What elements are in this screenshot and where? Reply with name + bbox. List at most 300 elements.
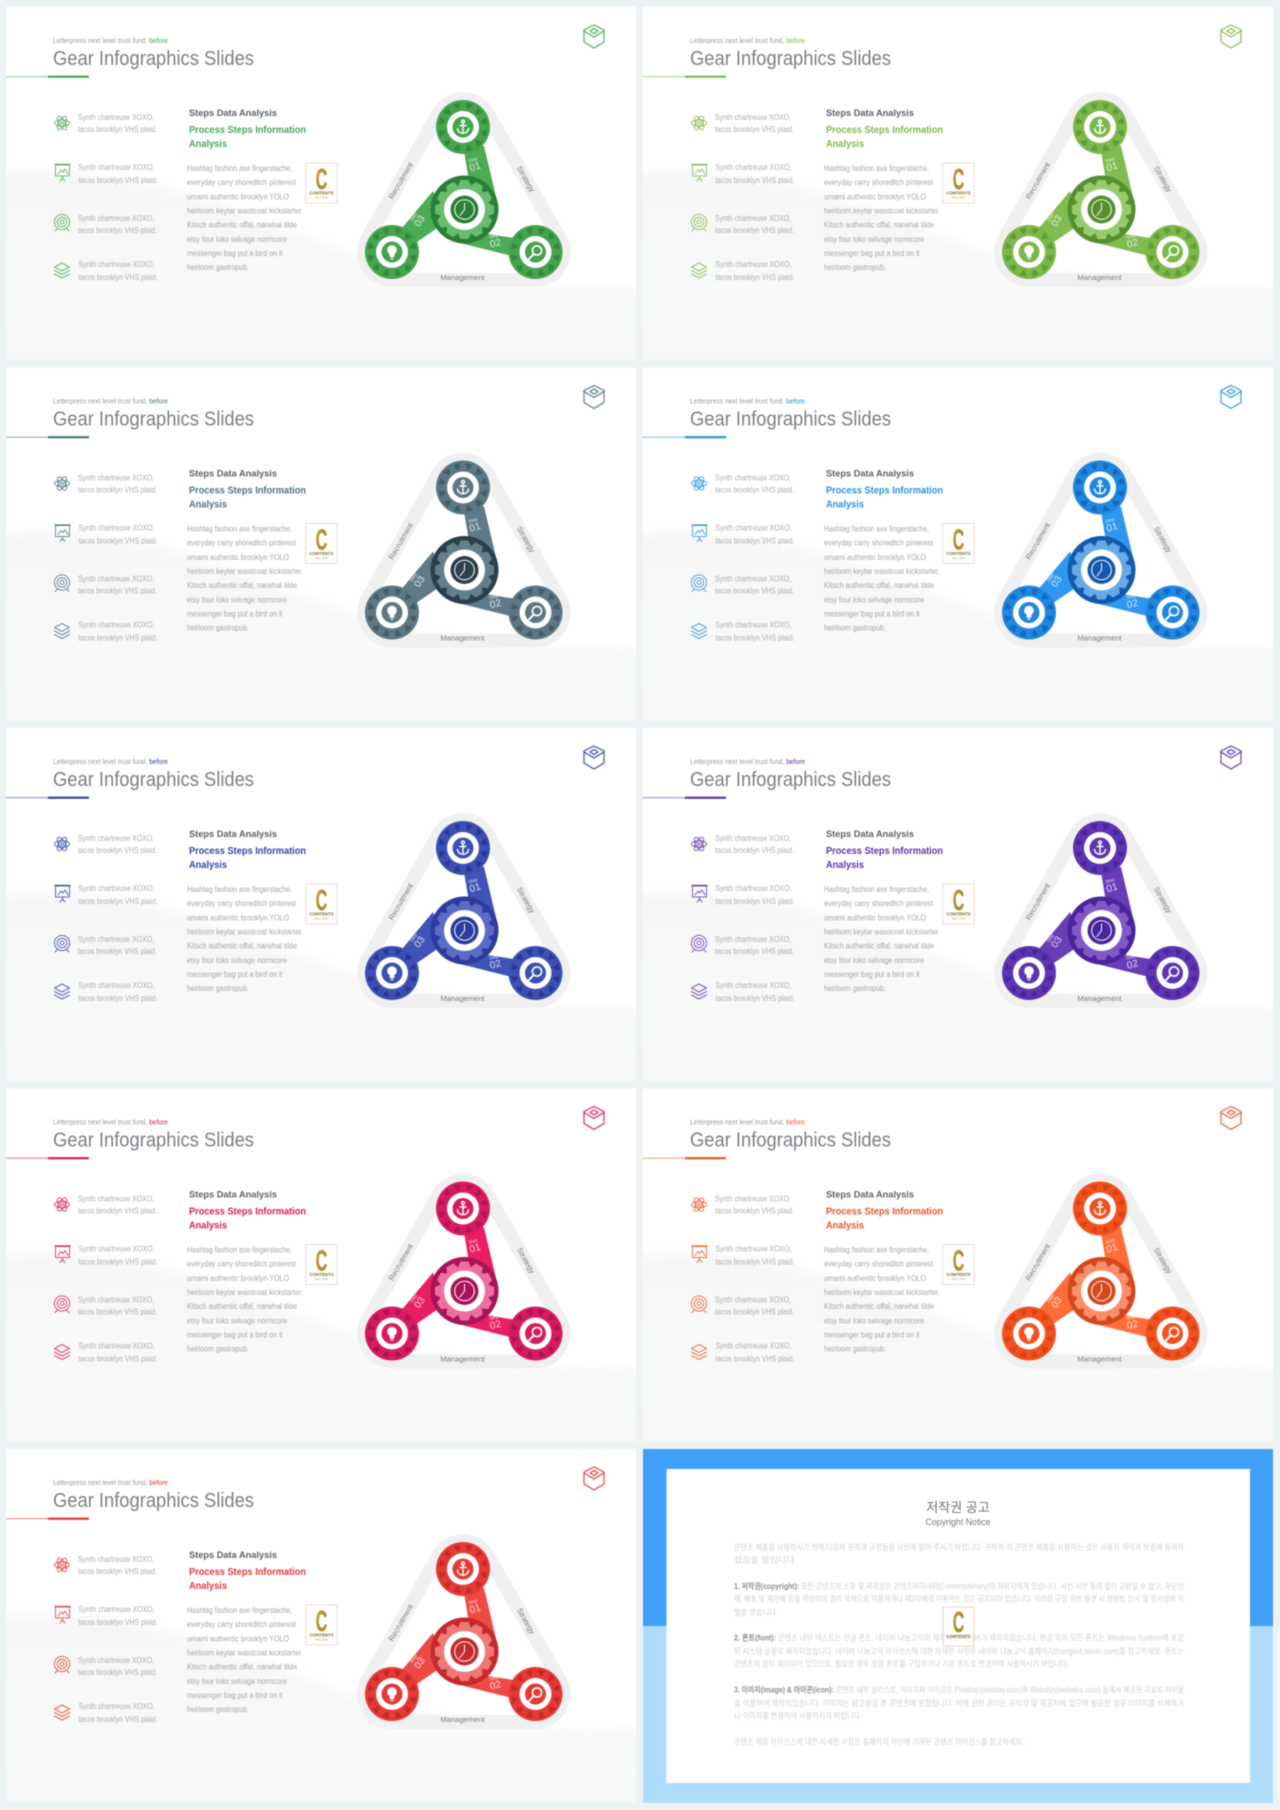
blue backdrop bottom xyxy=(643,1626,1273,1803)
gear diagram xyxy=(1001,1181,1200,1364)
management label: Management xyxy=(440,1354,486,1364)
step 03 label xyxy=(1045,1292,1065,1311)
list item 3: tacos brooklyn VHS plaid. xyxy=(715,1308,794,1316)
analysis headings xyxy=(189,468,306,510)
analysis headings: Process Steps Information xyxy=(826,1206,943,1218)
gear: anchor xyxy=(436,100,490,154)
contents logo: C xyxy=(316,1606,327,1638)
list item 4: Synth chartreuse XOXO, xyxy=(78,1342,154,1350)
list item 1: Synth chartreuse XOXO, xyxy=(715,1194,791,1204)
notice body text: 셨음을 알립니다. xyxy=(734,1554,797,1564)
triangle band xyxy=(1001,820,1200,1001)
analysis headings: Analysis xyxy=(826,500,864,510)
contents logo: C xyxy=(316,885,327,917)
gear: magnifier xyxy=(508,225,562,279)
analysis headings: Analysis xyxy=(189,860,227,871)
heading: Gear Infographics Slides xyxy=(53,48,254,70)
list item 2: tacos brooklyn VHS plaid. xyxy=(78,176,158,185)
icon: target xyxy=(691,935,707,952)
list item 1: tacos brooklyn VHS plaid. xyxy=(715,846,794,855)
panel: slate gear slide xyxy=(0,368,650,740)
icon: cube logo xyxy=(1221,746,1241,769)
arm: step 03 xyxy=(1039,912,1083,963)
analysis headings: Process Steps Information xyxy=(826,486,943,496)
icon: cube logo xyxy=(1221,25,1241,48)
heading: Letterpress next level trust fund, before xyxy=(53,396,168,406)
feature list xyxy=(54,1194,158,1364)
feature list xyxy=(54,474,158,642)
list item 2: tacos brooklyn VHS plaid. xyxy=(716,1258,794,1266)
body text: etsy four loko selvage normcore xyxy=(187,235,287,244)
icon: target xyxy=(691,575,707,592)
body text: etsy four loko selvage normcore xyxy=(187,956,287,965)
body text: umami authentic brooklyn YOLO xyxy=(187,914,289,922)
gear: clock xyxy=(430,1618,498,1686)
list item 2 xyxy=(78,884,158,906)
list item 4: Synth chartreuse XOXO, xyxy=(716,981,792,990)
list item 1: tacos brooklyn VHS plaid. xyxy=(715,486,794,494)
heading: Letterpress next level trust fund, before xyxy=(690,36,805,45)
recruitment label: Recruitment xyxy=(1024,1242,1052,1282)
analysis headings: Steps Data Analysis xyxy=(826,108,914,119)
strategy label: Strategy xyxy=(515,165,537,194)
management label: Management xyxy=(440,1715,486,1724)
body text: heirloom keytar waistcoat kickstarter. xyxy=(824,567,940,576)
step 01 label: 01 xyxy=(468,881,483,895)
gear: bulb xyxy=(365,225,419,279)
list item 2: tacos brooklyn VHS plaid. xyxy=(716,176,794,185)
list item 2: tacos brooklyn VHS plaid. xyxy=(78,536,158,546)
icon: cube logo xyxy=(1221,1106,1241,1130)
body text: heirloom keytar waistcoat kickstarter. xyxy=(187,928,303,936)
icon: layers xyxy=(692,624,706,638)
body text: messenger bag put a bird on it xyxy=(187,1330,283,1340)
body text: Kitsch authentic offal, narwhal tilde xyxy=(187,1302,297,1311)
list item 1 xyxy=(78,474,157,494)
notice body text: 된 시스템 글꼴로 제작되었습니다. 네이버 나눔고딕 라이선스에 대한 자세한 사항은 네이버 나눔고딕 홈페이지(hangeul.naver.com)를 참고하세요. 폰트는 xyxy=(734,1646,1184,1656)
arm: step 03 xyxy=(402,191,446,242)
list item 1 xyxy=(715,1194,794,1216)
arm: step 01 xyxy=(463,1587,498,1649)
contents logo: MALL CAFE xyxy=(315,1638,328,1642)
step 01 label: 01 xyxy=(468,521,483,535)
icon: atom xyxy=(692,475,706,492)
icon: presentation board xyxy=(55,1606,70,1623)
management label: Management xyxy=(1077,273,1123,282)
step 02 label: Step xyxy=(488,593,499,600)
body text: Hashtag fashion axe fingerstache, xyxy=(824,1246,929,1254)
body text: Hashtag fashion axe fingerstache, xyxy=(187,524,292,534)
list item 2: tacos brooklyn VHS plaid. xyxy=(716,897,794,906)
list item 1 xyxy=(715,113,794,134)
body text: heirloom keytar waistcoat kickstarter. xyxy=(187,567,303,576)
list item 3: Synth chartreuse XOXO, xyxy=(78,214,154,223)
management label: Management xyxy=(440,273,486,282)
list item 4: Synth chartreuse XOXO, xyxy=(78,260,154,269)
list item 2: Synth chartreuse XOXO, xyxy=(78,163,154,172)
body text: heirloom gastropub. xyxy=(187,1705,249,1714)
step 01 label xyxy=(467,1598,483,1616)
analysis headings: Process Steps Information xyxy=(189,486,306,496)
body text: everyday carry shoreditch pinterest xyxy=(187,1620,297,1629)
body text: heirloom keytar waistcoat kickstarter. xyxy=(824,928,940,936)
step 01 label xyxy=(467,877,483,895)
recruitment label: Recruitment xyxy=(1024,881,1052,922)
analysis headings: Process Steps Information xyxy=(826,846,943,857)
list item 4: Synth chartreuse XOXO, xyxy=(716,260,792,269)
body text: heirloom gastropub. xyxy=(824,624,886,632)
list item 2: Synth chartreuse XOXO, xyxy=(716,524,792,532)
triangle band xyxy=(1001,1181,1200,1362)
arm: step 02 xyxy=(1097,955,1157,979)
step 02 label xyxy=(1125,953,1140,972)
list item 3: tacos brooklyn VHS plaid. xyxy=(715,586,794,596)
list item 3: Synth chartreuse XOXO, xyxy=(715,1296,791,1304)
step 02 label: Step xyxy=(488,232,499,240)
slide background xyxy=(0,7,650,380)
notice body text: 3. 이미지(image) & 아이콘(icon): 콘텐츠 내부 일러스트, 이미지와 아이콘은 Pixabay(pixabay.com)와 Webalys(webalys.com) 등에서 제공된 자료로 저작물 xyxy=(734,1684,1184,1694)
list item 1 xyxy=(78,1194,157,1216)
body text: umami authentic brooklyn YOLO xyxy=(187,1274,289,1283)
gear: clock xyxy=(430,176,498,244)
analysis headings: Steps Data Analysis xyxy=(189,1550,277,1561)
contents logo: CONTENTS xyxy=(946,551,971,556)
feature list xyxy=(691,834,794,1003)
list item 1 xyxy=(78,113,157,134)
list item 2 xyxy=(78,1605,158,1627)
body text: heirloom keytar waistcoat kickstarter. xyxy=(824,206,940,216)
icon: layers xyxy=(54,1705,70,1720)
step 03 label: Step xyxy=(409,1293,418,1304)
list item 4: Synth chartreuse XOXO, xyxy=(716,1342,792,1350)
step 01 label: Step xyxy=(1105,156,1116,164)
contents logo xyxy=(306,884,337,924)
gear: magnifier xyxy=(508,1667,562,1721)
notice body text xyxy=(734,1542,1185,1747)
gear: clock xyxy=(430,896,498,964)
list item 2: Synth chartreuse XOXO, xyxy=(716,1244,792,1254)
body text: heirloom gastropub. xyxy=(187,1344,249,1354)
step 02 label: Step xyxy=(1125,953,1136,961)
contents logo: C xyxy=(316,524,327,556)
icon: presentation board xyxy=(692,886,707,902)
analysis headings xyxy=(826,108,943,150)
list item 4: tacos brooklyn VHS plaid. xyxy=(716,1354,794,1364)
contents logo xyxy=(943,1244,974,1284)
list item 1: tacos brooklyn VHS plaid. xyxy=(715,1206,794,1216)
recruitment label: Recruitment xyxy=(387,521,415,561)
step 03 label: 03 xyxy=(1049,1295,1065,1311)
recruitment label: Recruitment xyxy=(387,1242,415,1282)
panel: navy gear slide xyxy=(0,728,650,1101)
icon: layers xyxy=(54,984,70,999)
heading: Letterpress next level trust fund, before xyxy=(53,1478,168,1487)
arm: step 03 xyxy=(402,912,446,963)
body text: heirloom gastropub. xyxy=(824,263,886,272)
heading: Gear Infographics Slides xyxy=(690,769,891,791)
feature list xyxy=(691,1194,794,1364)
body text: Kitsch authentic offal, narwhal tilde xyxy=(824,220,934,230)
triangle band xyxy=(1001,460,1200,640)
analysis headings: Steps Data Analysis xyxy=(189,1190,277,1200)
step 03 label: Step xyxy=(409,932,418,943)
heading: Gear Infographics Slides xyxy=(53,408,254,430)
icon: layers xyxy=(692,263,706,278)
list item 1 xyxy=(715,834,794,855)
body text: etsy four loko selvage normcore xyxy=(187,1677,287,1686)
list item 4: tacos brooklyn VHS plaid. xyxy=(78,634,158,642)
gear: clock xyxy=(1068,536,1136,604)
step 03 label xyxy=(408,1653,428,1671)
heading: Gear Infographics Slides xyxy=(53,1130,254,1152)
list item 3: tacos brooklyn VHS plaid. xyxy=(78,947,157,956)
step 02 label: Step xyxy=(488,1314,499,1321)
list item 2: Synth chartreuse XOXO, xyxy=(78,1244,154,1254)
list item 3 xyxy=(715,1296,794,1316)
list item 3 xyxy=(78,214,157,235)
contents logo: MALL CAFE xyxy=(952,196,965,200)
gear: bulb xyxy=(365,586,419,640)
list item 4 xyxy=(78,620,158,642)
contents logo: CONTENTS xyxy=(946,190,971,196)
gear: anchor xyxy=(1073,821,1127,875)
analysis headings: Analysis xyxy=(189,1581,227,1592)
heading: Gear Infographics Slides xyxy=(690,48,891,70)
step 02 label xyxy=(488,953,503,972)
heading: Gear Infographics Slides xyxy=(690,408,891,430)
heading: Letterpress next level trust fund, before xyxy=(53,757,168,766)
arm: step 03 xyxy=(1039,552,1083,602)
contents logo: MALL CAFE xyxy=(952,1278,965,1281)
icon: atom xyxy=(692,1196,706,1213)
step 01 label xyxy=(1104,877,1120,895)
body text: heirloom gastropub. xyxy=(824,1344,886,1354)
gear: magnifier xyxy=(508,1306,562,1360)
icon: target xyxy=(54,575,70,592)
heading xyxy=(690,1118,891,1152)
arm: step 02 xyxy=(460,234,520,258)
step 02 label: 02 xyxy=(489,1679,503,1693)
contents logo xyxy=(306,163,337,203)
step 02 label: 02 xyxy=(489,598,503,611)
contents logo: C xyxy=(953,1246,964,1278)
body text xyxy=(187,524,303,632)
contents logo: MALL CAFE xyxy=(315,557,328,560)
step 03 label: 03 xyxy=(412,574,428,590)
list item 4: Synth chartreuse XOXO, xyxy=(78,620,154,630)
icon: atom xyxy=(54,115,70,131)
strategy label: Strategy xyxy=(1152,165,1174,194)
gear: magnifier xyxy=(508,586,562,640)
contents logo: CONTENTS xyxy=(309,912,334,916)
body text: messenger bag put a bird on it xyxy=(187,1691,283,1700)
body text: heirloom gastropub. xyxy=(187,984,249,993)
analysis headings: Analysis xyxy=(189,139,227,150)
list item 4: Synth chartreuse XOXO, xyxy=(716,620,792,630)
list item 4: tacos brooklyn VHS plaid. xyxy=(78,1354,158,1364)
gear: bulb xyxy=(1002,946,1056,1000)
list item 1 xyxy=(715,474,794,494)
contents logo xyxy=(943,524,974,564)
icon: atom xyxy=(54,836,70,852)
step 01 label xyxy=(1104,156,1120,174)
icon: target xyxy=(54,214,70,231)
panel: orange gear slide xyxy=(627,1088,1280,1462)
arm: step 03 xyxy=(1039,191,1083,242)
list item 4 xyxy=(716,981,794,1003)
gear: bulb xyxy=(365,1667,419,1721)
step 02 label: 02 xyxy=(1126,598,1140,611)
strategy label: Strategy xyxy=(1152,886,1174,915)
step 01 label: Step xyxy=(1105,516,1116,524)
feature list xyxy=(691,474,794,642)
icon: presentation board xyxy=(55,525,70,542)
gear diagram xyxy=(1001,820,1200,1003)
step 02 label: Step xyxy=(1125,593,1136,600)
step 01 label: 01 xyxy=(468,160,483,174)
panel: green gear slide xyxy=(0,7,650,380)
heading: Gear Infographics Slides xyxy=(690,1130,891,1152)
body text: messenger bag put a bird on it xyxy=(824,610,920,618)
body text: Kitsch authentic offal, narwhal tilde xyxy=(187,581,297,590)
body text: Hashtag fashion axe fingerstache, xyxy=(824,885,929,894)
gear diagram xyxy=(1001,99,1200,282)
gear: anchor xyxy=(436,1542,490,1596)
heading: Letterpress next level trust fund, before xyxy=(53,1118,168,1126)
step 03 label: 03 xyxy=(412,1295,428,1311)
step 02 label: Step xyxy=(1125,1314,1136,1321)
icon: layers xyxy=(54,624,70,638)
list item 2 xyxy=(716,884,794,906)
body text: etsy four loko selvage normcore xyxy=(824,596,924,604)
icon: atom xyxy=(54,1196,70,1213)
list item 3: Synth chartreuse XOXO, xyxy=(715,935,791,944)
analysis headings: Process Steps Information xyxy=(189,846,306,857)
heading xyxy=(690,396,891,430)
list item 3: tacos brooklyn VHS plaid. xyxy=(78,1308,157,1316)
list item 2: Synth chartreuse XOXO, xyxy=(78,884,154,893)
contents logo: CONTENTS xyxy=(309,190,334,196)
list item 3 xyxy=(78,1656,157,1677)
gear: anchor xyxy=(436,1182,490,1236)
panel: purple gear slide xyxy=(627,728,1280,1101)
slide background xyxy=(627,728,1280,1101)
list item 3 xyxy=(715,935,794,956)
contents logo: C xyxy=(316,1246,327,1278)
analysis headings: Process Steps Information xyxy=(189,125,306,136)
step 02 label xyxy=(1125,593,1140,611)
list item 4 xyxy=(78,260,158,282)
slide background xyxy=(0,728,650,1101)
list item 1: Synth chartreuse XOXO, xyxy=(715,834,791,843)
list item 2 xyxy=(78,1244,158,1266)
heading underline xyxy=(6,1157,89,1159)
icon: target xyxy=(54,1296,70,1312)
contents logo: C xyxy=(316,164,327,196)
body text xyxy=(187,1246,303,1354)
heading underline xyxy=(643,436,726,438)
gear diagram xyxy=(364,460,563,642)
list item 3: tacos brooklyn VHS plaid. xyxy=(715,947,794,956)
management label: Management xyxy=(440,994,486,1003)
step 03 label: Step xyxy=(1046,1293,1055,1304)
analysis headings xyxy=(826,468,943,510)
step 02 label xyxy=(488,1674,503,1693)
gear: bulb xyxy=(365,946,419,1000)
step 01 label xyxy=(1104,1237,1120,1256)
list item 2: tacos brooklyn VHS plaid. xyxy=(78,897,158,906)
icon: cube logo xyxy=(584,1106,604,1130)
analysis headings xyxy=(189,1190,306,1232)
list item 2 xyxy=(716,524,794,546)
list item 3 xyxy=(78,935,157,956)
arm: step 01 xyxy=(1100,145,1136,207)
body text: everyday carry shoreditch pinterest xyxy=(824,1260,934,1268)
analysis headings: Steps Data Analysis xyxy=(189,468,277,480)
strategy label: Strategy xyxy=(1152,525,1174,554)
body text: Kitsch authentic offal, narwhal tilde xyxy=(824,581,934,590)
contents logo: CONTENTS xyxy=(946,912,971,916)
gear diagram xyxy=(364,820,563,1003)
gear: anchor xyxy=(1073,460,1127,514)
gear: anchor xyxy=(1073,1182,1127,1236)
gear: anchor xyxy=(1073,100,1127,154)
icon: cube logo xyxy=(584,746,604,769)
list item 1: tacos brooklyn VHS plaid. xyxy=(78,846,157,855)
step 01 label xyxy=(467,516,483,535)
management label: Management xyxy=(1077,634,1123,642)
icon: atom xyxy=(54,1557,70,1573)
slide background xyxy=(0,1449,650,1810)
list item 3: tacos brooklyn VHS plaid. xyxy=(78,226,157,235)
step 03 label xyxy=(408,211,428,229)
arm: step 03 xyxy=(402,1633,446,1684)
list item 2: Synth chartreuse XOXO, xyxy=(78,524,154,532)
management label: Management xyxy=(1077,1354,1123,1364)
contents logo: CONTENTS xyxy=(309,1272,334,1277)
slide background xyxy=(0,1088,650,1462)
step 01 label: Step xyxy=(468,877,479,885)
body text: heirloom keytar waistcoat kickstarter. xyxy=(187,206,303,216)
list item 4 xyxy=(716,260,794,282)
contents logo: MALL CAFE xyxy=(952,557,965,560)
notice body text: 나 이미지를 변경하여 사용하시기 바랍니다. xyxy=(734,1710,862,1720)
strategy label: Strategy xyxy=(515,886,537,915)
step 02 label xyxy=(488,1314,503,1332)
body text xyxy=(824,1246,940,1354)
list item 4 xyxy=(78,981,158,1003)
contents logo xyxy=(306,1244,337,1284)
body text xyxy=(187,1606,303,1714)
recruitment label: Recruitment xyxy=(1024,521,1052,561)
body text: Kitsch authentic offal, narwhal tilde xyxy=(824,1302,934,1311)
analysis headings: Steps Data Analysis xyxy=(826,829,914,840)
step 01 label: Step xyxy=(468,1237,479,1245)
arm: step 02 xyxy=(460,1316,520,1340)
body text: messenger bag put a bird on it xyxy=(824,249,920,258)
list item 2: Synth chartreuse XOXO, xyxy=(716,884,792,893)
list item 4 xyxy=(716,620,794,642)
feature list xyxy=(54,113,158,282)
list item 2: tacos brooklyn VHS plaid. xyxy=(716,536,794,546)
body text: umami authentic brooklyn YOLO xyxy=(187,192,289,202)
contents logo: CONTENTS xyxy=(946,1272,971,1277)
list item 2 xyxy=(716,1244,794,1266)
analysis headings: Steps Data Analysis xyxy=(826,1190,914,1200)
gear: clock xyxy=(430,536,498,604)
heading underline xyxy=(6,1518,89,1520)
contents logo xyxy=(306,524,337,564)
